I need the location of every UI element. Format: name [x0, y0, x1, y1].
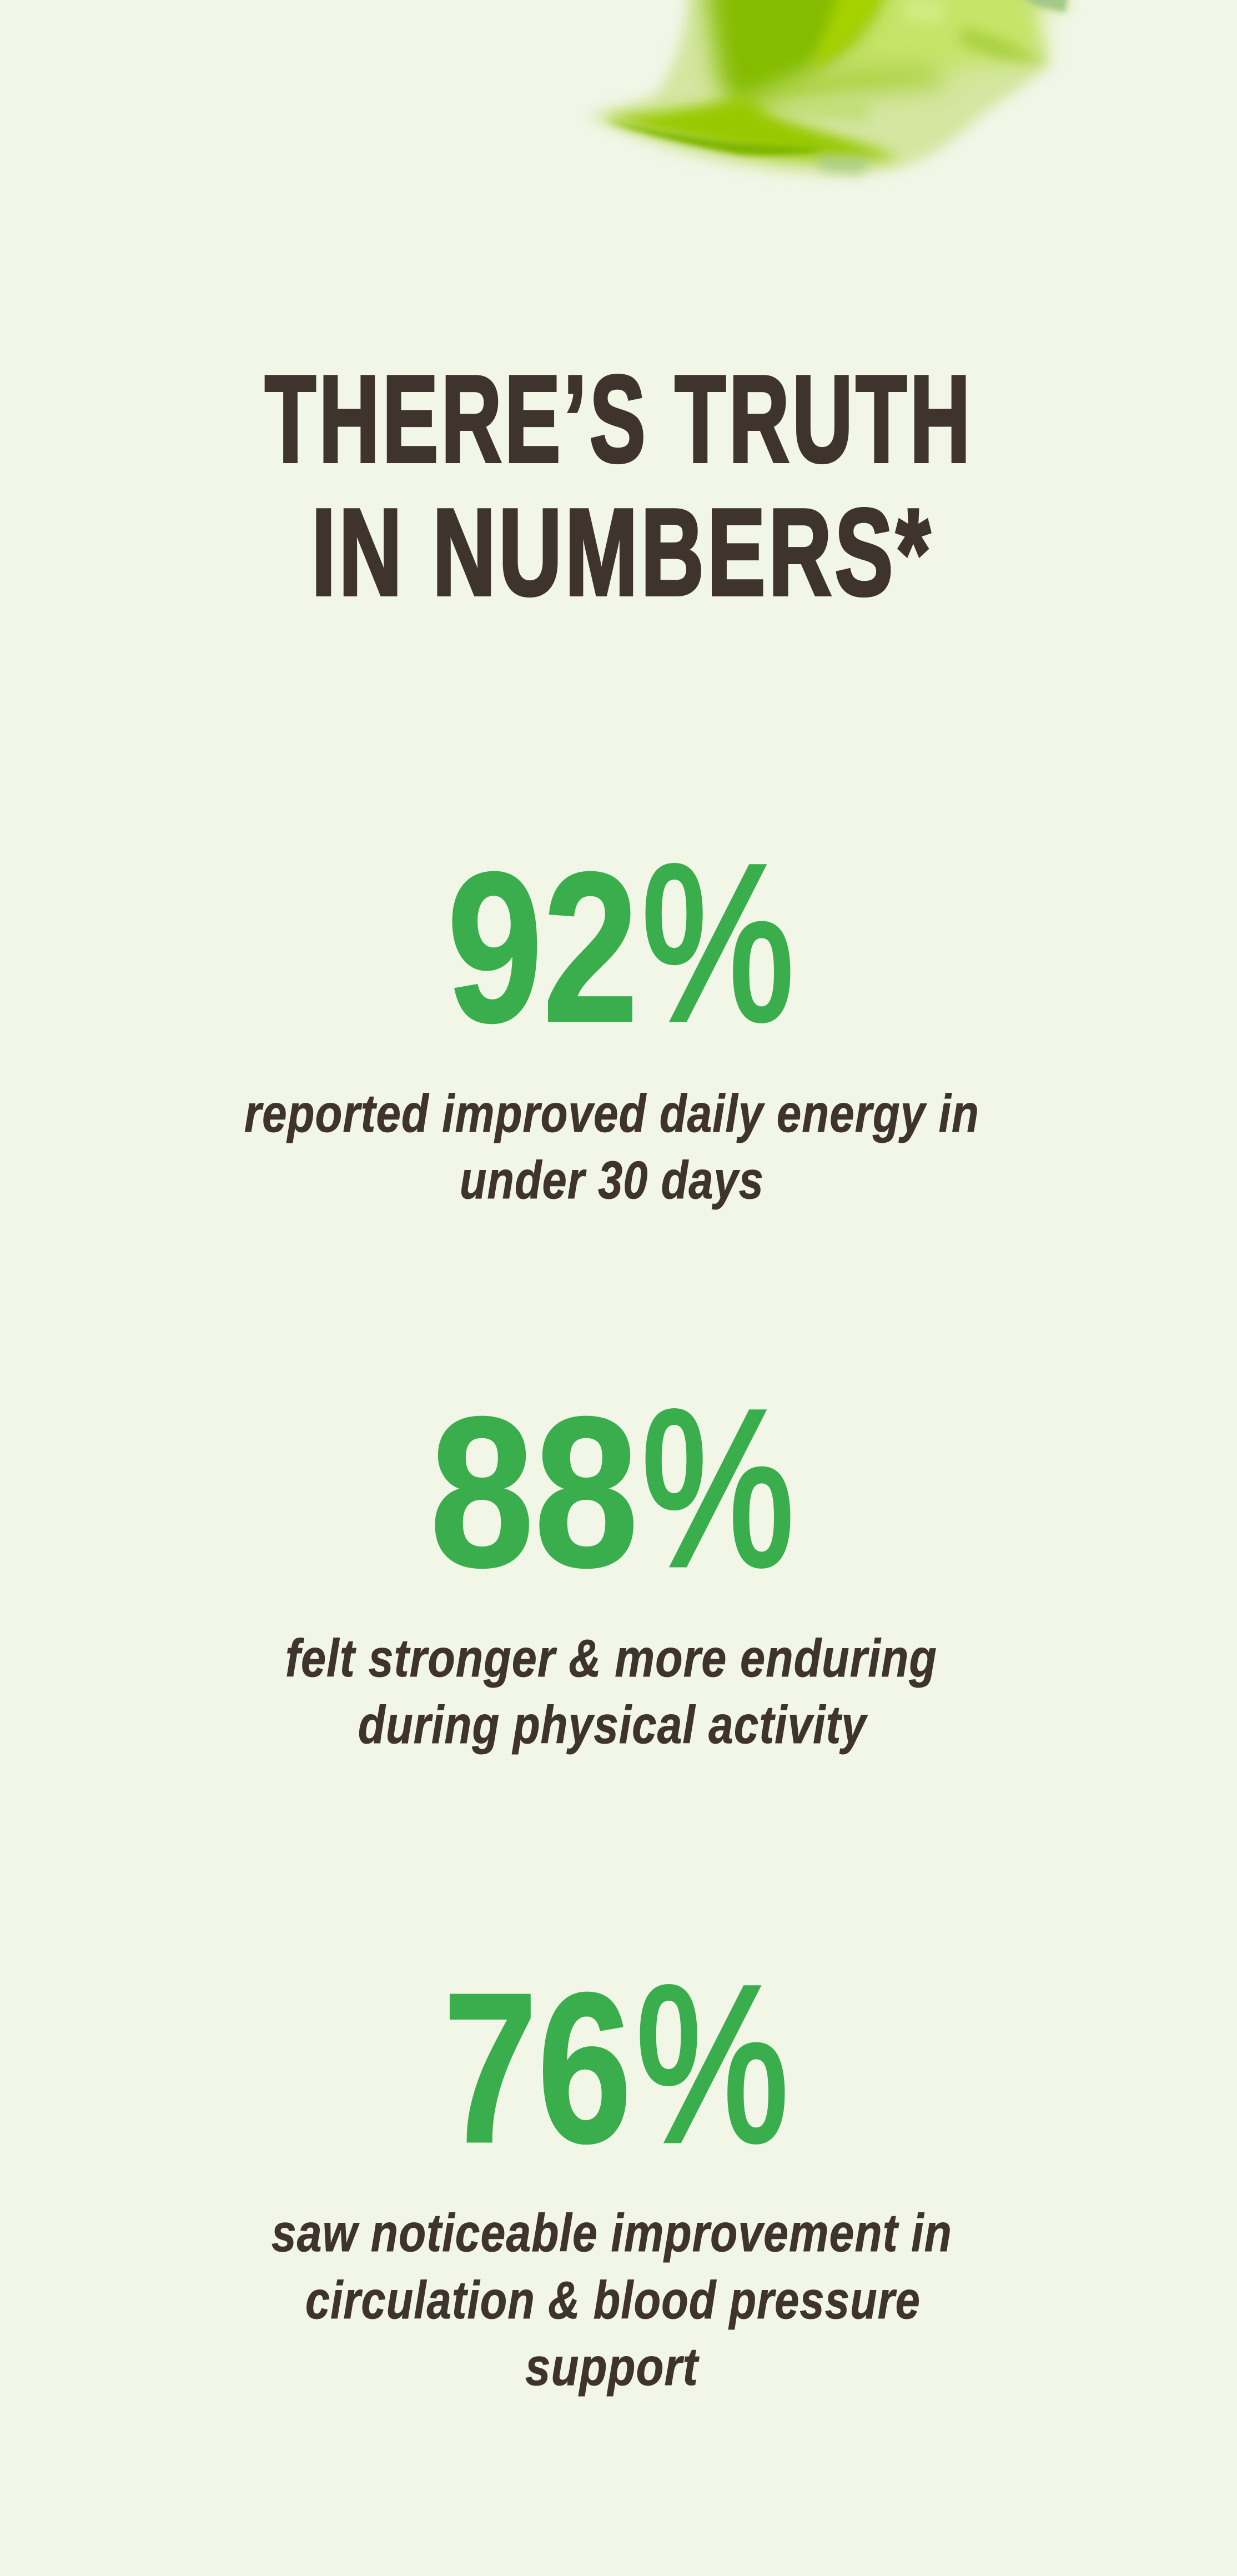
number: 92%: %	[641, 819, 795, 1067]
number: 76%: 76	[443, 1948, 632, 2187]
caption: 88%	[285, 1629, 937, 1755]
number: 88%	[430, 1364, 795, 1612]
caption: 76%: support	[525, 2337, 700, 2397]
stat: 92%	[244, 819, 979, 1210]
number: 76%: %	[636, 1940, 789, 2188]
caption: 92%	[244, 1084, 979, 1210]
number: 76%	[443, 1940, 789, 2188]
caption: 88%: felt stronger & more enduring	[285, 1629, 937, 1688]
number: 92%: 92	[447, 827, 638, 1067]
title	[265, 350, 973, 621]
caption: 88%: during physical activity	[358, 1695, 868, 1755]
title: IN NUMBERS*	[311, 484, 933, 621]
stat: 76%	[271, 1940, 952, 2397]
number: 88%: 88	[430, 1372, 638, 1611]
caption: 76%: saw noticeable improvement in	[271, 2203, 952, 2263]
caption: 92%: reported improved daily energy in	[244, 1084, 979, 1143]
caption: 76%: circulation & blood pressure	[305, 2271, 921, 2330]
caption: 92%: under 30 days	[460, 1151, 764, 1210]
stat: 88%	[285, 1364, 937, 1755]
number: 88%: %	[641, 1364, 795, 1612]
number: 92%	[447, 819, 795, 1067]
illustration: blurred green leaf	[589, 0, 1069, 174]
caption: 76%	[271, 2203, 952, 2397]
